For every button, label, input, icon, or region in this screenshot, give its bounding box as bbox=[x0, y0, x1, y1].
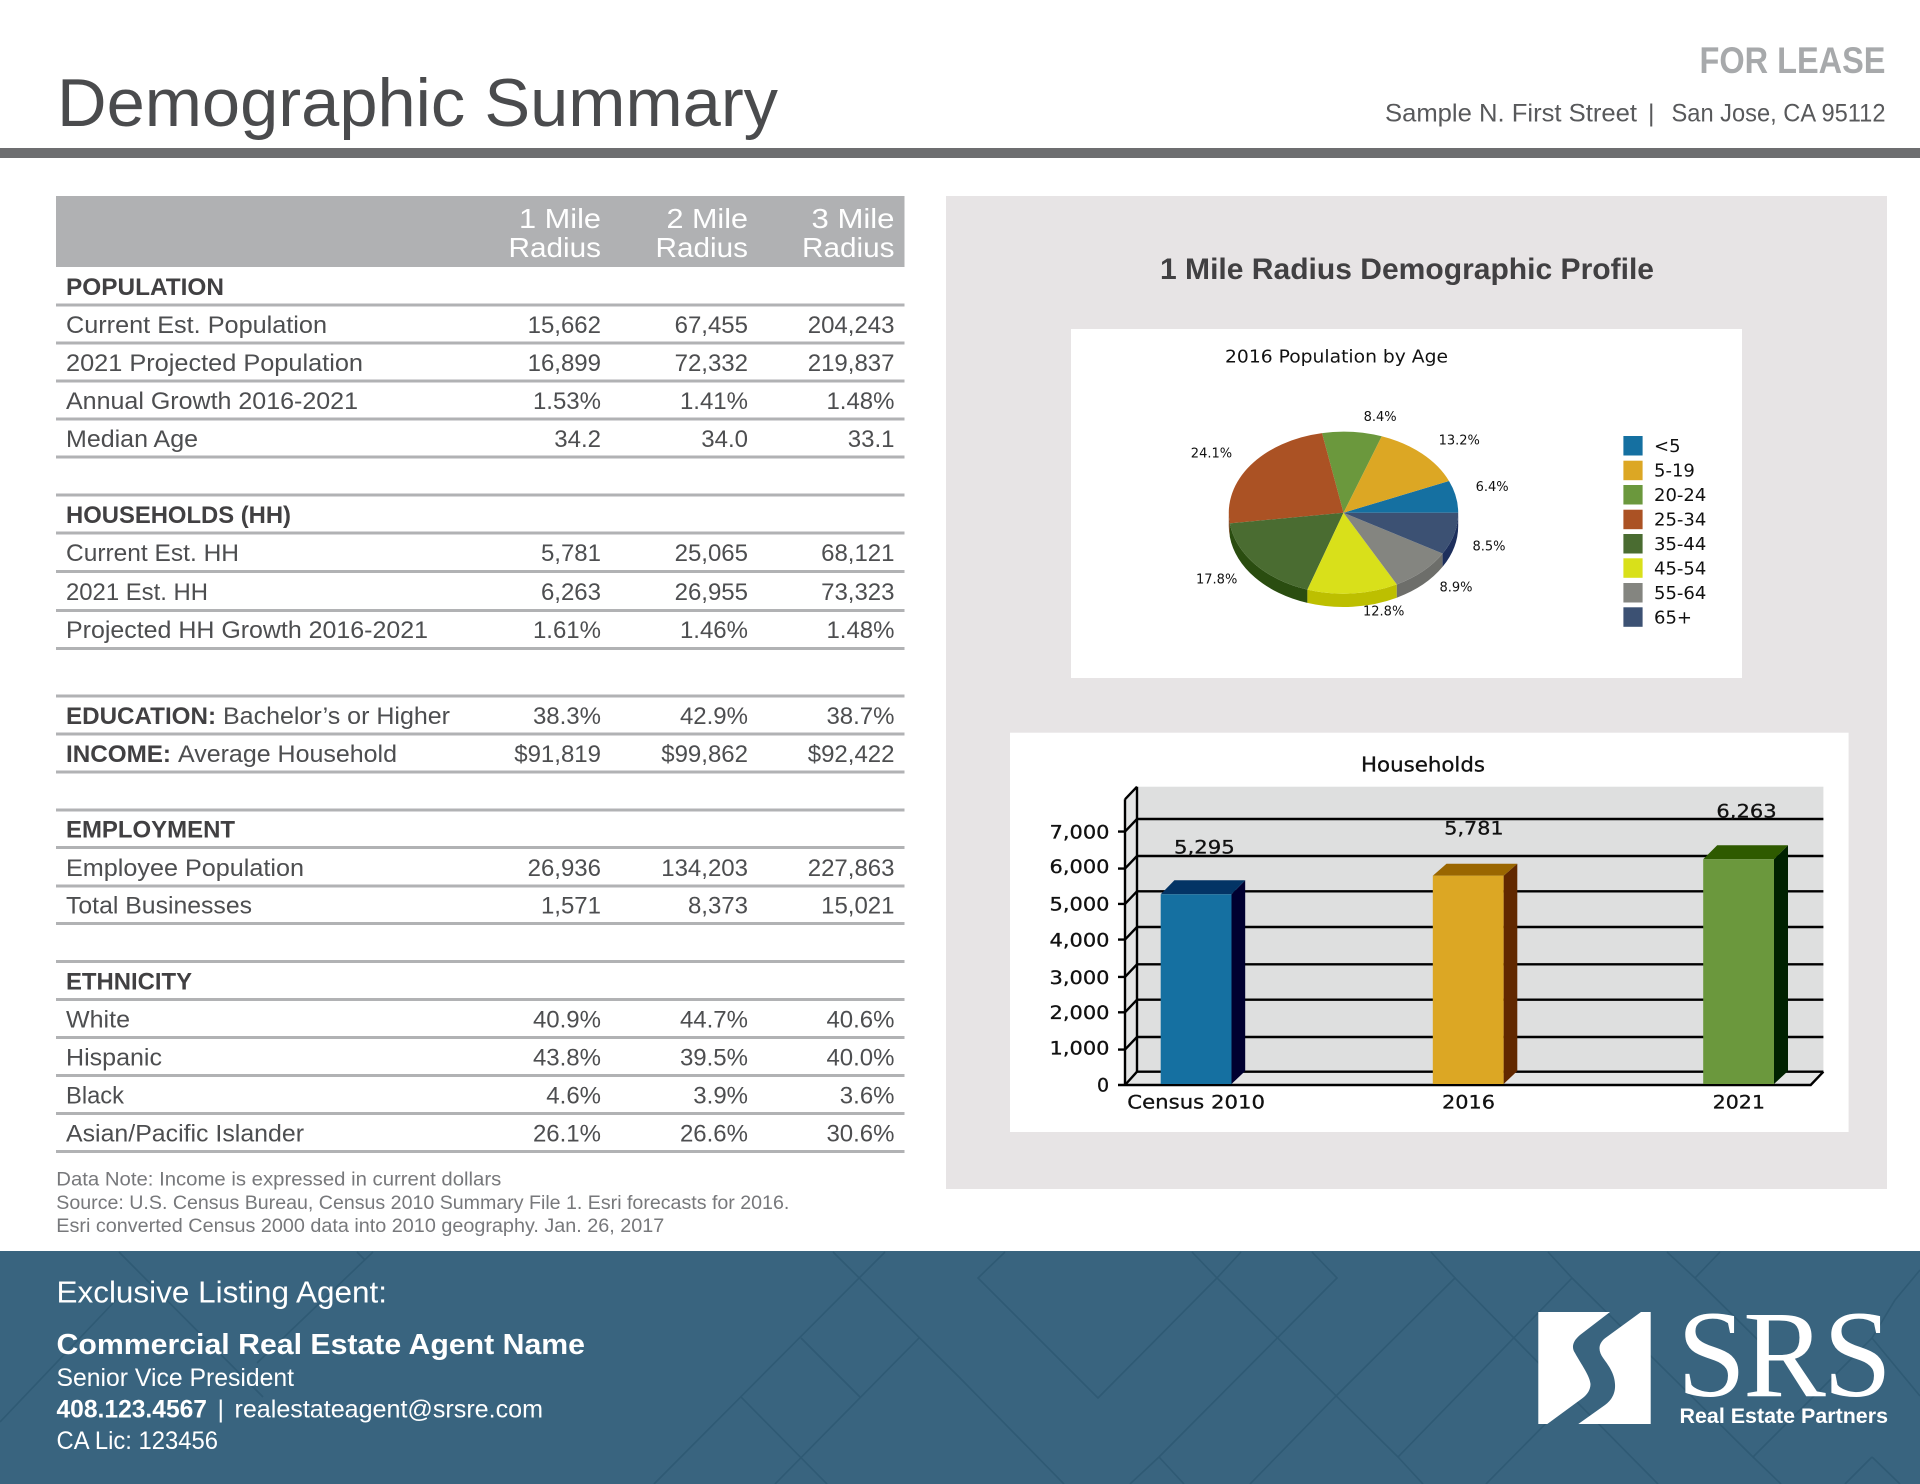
row: 2021 projected population: 2021 Projected Population bbox=[66, 350, 363, 377]
row: hispanic: 39.5% bbox=[680, 1044, 748, 1072]
table header band: 1 Mile bbox=[519, 203, 601, 234]
row: education: 42.9% bbox=[680, 703, 748, 730]
row: black: Black bbox=[66, 1082, 125, 1110]
x axis labels: 2021 bbox=[1713, 1091, 1765, 1113]
row: total businesses: 1,571 bbox=[541, 892, 601, 920]
x axis labels bbox=[1127, 1091, 1765, 1113]
table header band: 2 Mile bbox=[666, 203, 748, 234]
table header band bbox=[56, 196, 904, 267]
bar value labels bbox=[1174, 800, 1777, 858]
footnotes: Source: U.S. Census Bureau, Census 2010 Summary File 1. Esri forecasts for 2016. bbox=[56, 1193, 789, 1214]
row: education: Bachelor’s or Higher bbox=[223, 703, 450, 730]
row: employee population bbox=[66, 855, 894, 882]
row: employee population: 26,936 bbox=[528, 855, 601, 882]
row: median age: 34.0 bbox=[701, 426, 748, 453]
pie percentage labels bbox=[1191, 410, 1509, 620]
agent contact text: Exclusive Listing Agent: bbox=[56, 1274, 387, 1310]
heading: households: HOUSEHOLDS (HH) bbox=[66, 502, 291, 529]
y axis labels: 5,000 bbox=[1050, 894, 1110, 916]
bar value labels: 5,781 bbox=[1444, 817, 1504, 839]
logo wordmark: SRS bbox=[1677, 1286, 1892, 1423]
row: current est population: 204,243 bbox=[808, 312, 894, 339]
row: white bbox=[66, 1006, 894, 1034]
row: 2021 est hh: 26,955 bbox=[675, 579, 748, 606]
row: 2021 projected population: 16,899 bbox=[528, 350, 601, 377]
bar chart card bbox=[1010, 733, 1849, 1132]
pie legend: 55-64 bbox=[1654, 583, 1706, 604]
agent contact text: | bbox=[218, 1396, 224, 1424]
pie percentage labels: 8.5% bbox=[1472, 540, 1506, 555]
pie legend: <5 bbox=[1654, 436, 1681, 457]
pie percentage labels: 6.4% bbox=[1476, 480, 1509, 495]
row: hispanic: Hispanic bbox=[66, 1044, 162, 1072]
table header band: 3 Mile bbox=[812, 203, 894, 234]
y axis labels: 1,000 bbox=[1050, 1038, 1110, 1060]
row: black: 4.6% bbox=[546, 1082, 601, 1110]
row: black: 3.6% bbox=[840, 1082, 894, 1110]
bar: 2021 bbox=[1703, 845, 1788, 1084]
row: hispanic: 43.8% bbox=[533, 1044, 601, 1072]
bar value labels: 5,295 bbox=[1174, 836, 1235, 858]
pie chart card bbox=[1071, 329, 1742, 678]
footer band bbox=[0, 1251, 1920, 1484]
bar: 2016 bbox=[1433, 864, 1517, 1084]
footnotes: Data Note: Income is expressed in current dollars bbox=[56, 1170, 501, 1190]
row: projected hh growth bbox=[66, 617, 894, 644]
row: black: 3.9% bbox=[693, 1082, 748, 1110]
row: current est hh: 5,781 bbox=[541, 540, 601, 567]
table header band: Radius bbox=[656, 232, 748, 263]
row: current est hh bbox=[66, 540, 894, 567]
bar chart title: Households bbox=[1361, 753, 1485, 777]
row: median age: 33.1 bbox=[848, 426, 894, 453]
footnotes: Esri converted Census 2000 data into 2010 geography. Jan. 26, 2017 bbox=[56, 1216, 664, 1237]
pie legend: 65+ bbox=[1654, 608, 1692, 628]
panel: demographic profile bbox=[946, 196, 1887, 1189]
pie legend: 45-54 bbox=[1654, 558, 1706, 579]
pie legend: 5-19 bbox=[1654, 461, 1695, 482]
row: annual growth: 1.53% bbox=[533, 388, 601, 415]
y axis labels bbox=[1050, 821, 1110, 1097]
row: current est hh: 25,065 bbox=[675, 540, 748, 567]
row: current est population: Current Est. Population bbox=[66, 312, 327, 339]
agent contact text bbox=[56, 1274, 585, 1455]
row: asian pacific islander: 30.6% bbox=[826, 1120, 894, 1148]
logo: SRS Real Estate Partners bbox=[1538, 1286, 1892, 1428]
pie percentage labels: 12.8% bbox=[1363, 605, 1404, 620]
row: education bbox=[66, 703, 894, 730]
row: 2021 est hh: 6,263 bbox=[541, 579, 601, 606]
footnotes bbox=[56, 1170, 789, 1237]
pie legend: 20-24 bbox=[1654, 485, 1706, 506]
pie legend: 25-34 bbox=[1654, 510, 1706, 530]
row: projected hh growth: 1.46% bbox=[680, 617, 748, 644]
pie percentage labels: 8.4% bbox=[1364, 410, 1397, 425]
pie legend bbox=[1623, 436, 1706, 628]
x axis labels: 2016 bbox=[1442, 1091, 1495, 1113]
address: Sample N. First Street bbox=[1385, 100, 1637, 128]
agent contact text: realestateagent@srsre.com bbox=[234, 1396, 543, 1424]
bar: census 2010 bbox=[1161, 880, 1245, 1084]
logo tagline: Real Estate Partners bbox=[1680, 1405, 1888, 1428]
row: median age: 34.2 bbox=[554, 426, 601, 453]
row: 2021 est hh: 73,323 bbox=[821, 579, 894, 606]
row: income bbox=[66, 741, 894, 768]
row: projected hh growth: 1.61% bbox=[533, 617, 601, 644]
table header band: Radius bbox=[802, 232, 894, 263]
row: total businesses: Total Businesses bbox=[66, 892, 252, 920]
y axis labels: 0 bbox=[1097, 1075, 1109, 1097]
pie percentage labels: 8.9% bbox=[1440, 580, 1473, 595]
heading: employment: EMPLOYMENT bbox=[66, 816, 235, 844]
pie percentage labels: 24.1% bbox=[1191, 446, 1232, 461]
row: total businesses: 15,021 bbox=[821, 892, 894, 920]
row: white: 40.9% bbox=[533, 1006, 601, 1034]
pie percentage labels: 17.8% bbox=[1196, 572, 1237, 587]
row: education: EDUCATION: bbox=[66, 703, 216, 730]
row: hispanic bbox=[66, 1044, 894, 1072]
row: education: 38.3% bbox=[533, 703, 601, 730]
address: San Jose, CA 95112 bbox=[1672, 100, 1886, 128]
y axis labels: 3,000 bbox=[1050, 967, 1110, 989]
icon: S mark bbox=[1538, 1312, 1651, 1424]
row: employee population: 227,863 bbox=[808, 855, 894, 882]
y axis labels: 4,000 bbox=[1050, 930, 1110, 952]
row: income: $91,819 bbox=[514, 741, 601, 768]
row: 2021 projected population: 72,332 bbox=[675, 350, 748, 377]
row: median age bbox=[66, 426, 894, 453]
pie chart bbox=[1229, 432, 1458, 607]
row: total businesses: 8,373 bbox=[688, 892, 748, 920]
heading: population: POPULATION bbox=[66, 274, 224, 301]
row: income: Average Household bbox=[178, 741, 397, 768]
x axis labels: Census 2010 bbox=[1127, 1091, 1265, 1113]
row: asian pacific islander bbox=[66, 1120, 894, 1148]
row: annual growth: Annual Growth 2016-2021 bbox=[66, 388, 358, 415]
row: hispanic: 40.0% bbox=[826, 1044, 894, 1072]
heading: ethnicity: ETHNICITY bbox=[66, 968, 192, 996]
row: employee population: Employee Population bbox=[66, 855, 304, 882]
row: employee population: 134,203 bbox=[661, 855, 748, 882]
pie legend: 35-44 bbox=[1654, 534, 1706, 555]
row: asian pacific islander: Asian/Pacific Islander bbox=[66, 1120, 304, 1148]
y axis labels: 7,000 bbox=[1050, 821, 1110, 843]
row: income: $99,862 bbox=[661, 741, 748, 768]
row: median age: Median Age bbox=[66, 426, 198, 453]
pie chart title: 2016 Population by Age bbox=[1225, 346, 1448, 368]
row: current est hh: 68,121 bbox=[821, 540, 894, 567]
row: white: 40.6% bbox=[826, 1006, 894, 1034]
row: 2021 est hh: 2021 Est. HH bbox=[66, 579, 208, 606]
bar value labels: 6,263 bbox=[1716, 800, 1777, 822]
row: black bbox=[66, 1082, 894, 1110]
panel heading: 1 Mile Radius Demographic Profile bbox=[1160, 253, 1654, 286]
row: 2021 est hh bbox=[66, 579, 894, 606]
for lease label: FOR LEASE bbox=[1700, 40, 1886, 81]
row: asian pacific islander: 26.1% bbox=[533, 1120, 601, 1148]
row: current est population: 67,455 bbox=[675, 312, 748, 339]
row: 2021 projected population: 219,837 bbox=[808, 350, 894, 377]
header rule bbox=[0, 148, 1920, 158]
row: total businesses bbox=[66, 892, 894, 920]
row: current est population: 15,662 bbox=[528, 312, 601, 339]
y axis labels: 2,000 bbox=[1050, 1002, 1110, 1024]
agent contact text: Senior Vice President bbox=[56, 1364, 294, 1392]
row: current est hh: Current Est. HH bbox=[66, 540, 239, 567]
table header band: Radius bbox=[508, 232, 601, 263]
row: annual growth: 1.48% bbox=[826, 388, 894, 415]
row: white: 44.7% bbox=[680, 1006, 748, 1034]
y axis labels: 6,000 bbox=[1050, 856, 1110, 878]
agent contact text: CA Lic: 123456 bbox=[56, 1427, 218, 1455]
row: annual growth: 1.41% bbox=[680, 388, 748, 415]
row: current est population bbox=[66, 312, 894, 339]
header bbox=[0, 40, 1920, 158]
title: Demographic Summary bbox=[57, 65, 778, 141]
row: income: $92,422 bbox=[808, 741, 894, 768]
bar chart plot bbox=[1118, 787, 1823, 1085]
row: income: INCOME: bbox=[66, 741, 171, 768]
row: 2021 projected population bbox=[66, 350, 894, 377]
agent contact text: 408.123.4567 bbox=[56, 1396, 207, 1424]
row: projected hh growth: 1.48% bbox=[826, 617, 894, 644]
row: education: 38.7% bbox=[826, 703, 894, 730]
row: projected hh growth: Projected HH Growth 2016-2021 bbox=[66, 617, 428, 644]
address bbox=[1385, 100, 1886, 128]
pie percentage labels: 13.2% bbox=[1439, 433, 1480, 448]
address: | bbox=[1648, 100, 1654, 128]
agent contact text: Commercial Real Estate Agent Name bbox=[56, 1329, 585, 1361]
row: white: White bbox=[66, 1006, 130, 1034]
row: annual growth bbox=[66, 388, 894, 415]
panel: demographics table bbox=[56, 196, 904, 1153]
row: asian pacific islander: 26.6% bbox=[680, 1120, 748, 1148]
